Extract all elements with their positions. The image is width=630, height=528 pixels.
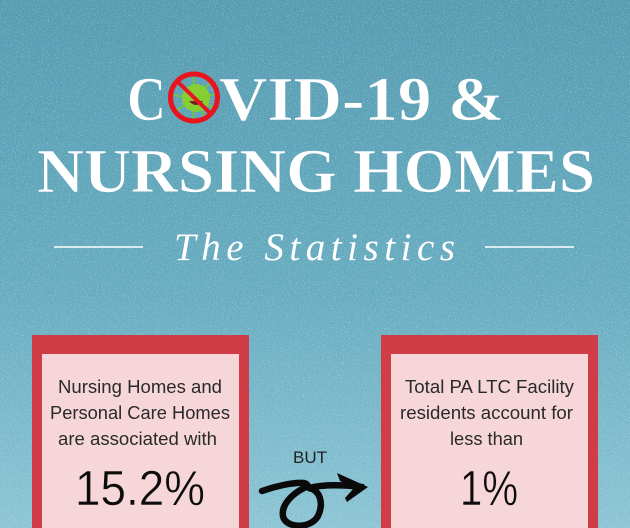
title: C [127, 66, 166, 134]
title [37, 66, 595, 206]
arrow [262, 473, 368, 526]
left panel text [50, 377, 230, 449]
right statistic value: 1% [460, 462, 518, 516]
right panel text: less than [450, 429, 523, 449]
panel: left statistic [32, 335, 249, 528]
right panel text [400, 377, 574, 449]
right panel text: Total PA LTC Facility [405, 377, 574, 397]
subtitle: The Statistics [174, 226, 455, 269]
icon: crossed-out virus [170, 74, 218, 121]
left panel text: are associated with [58, 429, 217, 449]
panel: right statistic [381, 335, 598, 528]
left statistic value: 15.2% [75, 462, 205, 516]
right panel text: residents account for [400, 403, 573, 423]
title: NURSING HOMES [37, 138, 595, 206]
left panel text: Nursing Homes and [58, 377, 222, 397]
label: BUT: BUT [293, 448, 327, 467]
left panel text: Personal Care Homes [50, 403, 230, 423]
title: VID-19 & [219, 66, 504, 134]
